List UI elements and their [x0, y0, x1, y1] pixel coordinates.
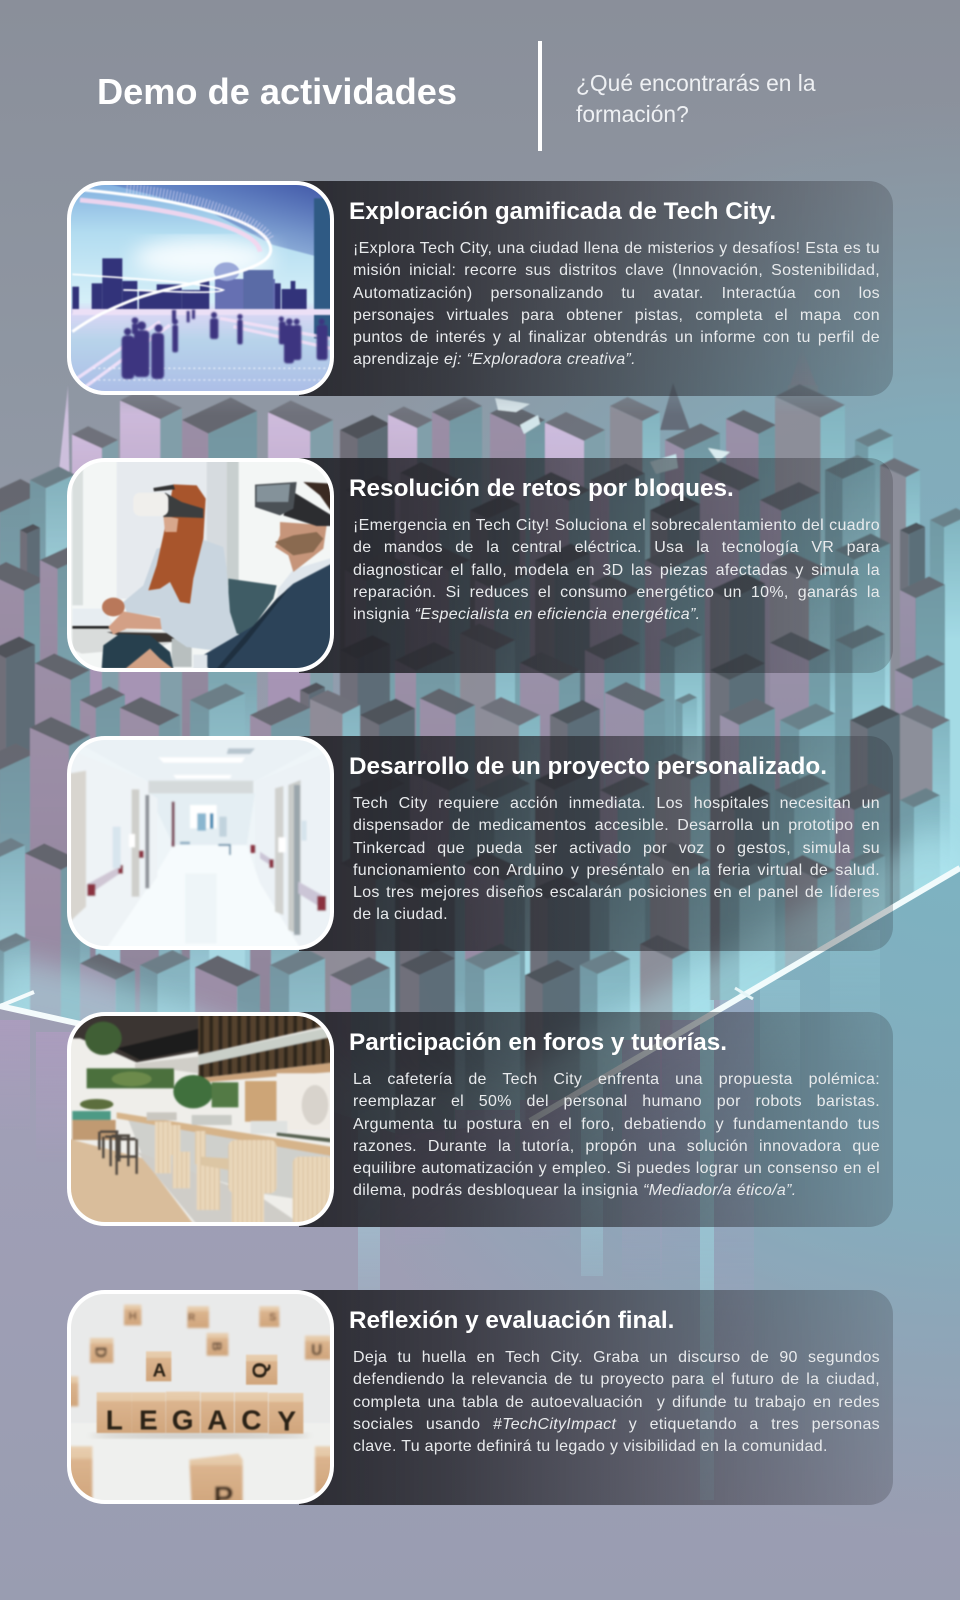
- panel background: [299, 1290, 893, 1505]
- body text: funcionamiento con Arduino y preséntalo en la feria virtual de salud.: [353, 862, 880, 879]
- subtitle: formación?: [576, 101, 689, 127]
- panel: exploración gamificada: [67, 181, 893, 396]
- heading: Reflexión y evaluación final.: [349, 1307, 674, 1334]
- body text: insignia “Especialista en eficiencia energética”.: [353, 606, 700, 623]
- body text: equilibre automatización y empleo. Si puedes lograr un consenso en el: [353, 1160, 880, 1177]
- photo: wooden LEGACY blocks: [67, 1290, 334, 1504]
- body text: razones. Durante la tutoría, propón una solución innovadora que: [353, 1138, 880, 1155]
- panel background: [299, 458, 893, 673]
- photo: futuristic city with people: [67, 181, 334, 395]
- body text: defendiendo la relevancia de tu proyecto para el futuro de la ciudad,: [353, 1371, 880, 1388]
- title: Demo de actividades: [97, 71, 457, 112]
- body text: [353, 1349, 880, 1455]
- panel: participación en foros: [67, 1012, 893, 1227]
- photo: wooden LEGACY blocks: Y: [277, 1405, 296, 1436]
- panel: reflexión y evaluación: [67, 1290, 893, 1505]
- photo: wooden LEGACY blocks: Q: [248, 1362, 271, 1378]
- heading: Desarrollo de un proyecto personalizado.: [349, 753, 827, 780]
- body text: ¡Explora Tech City, una ciudad llena de misterios y desafíos! Esta es tu: [353, 240, 880, 257]
- panel background: [299, 736, 893, 951]
- body text: reemplazar el 50% del personal humano por robots baristas.: [353, 1093, 880, 1110]
- body text: La cafetería de Tech City enfrenta una propuesta polémica:: [353, 1071, 880, 1088]
- header divider: [538, 41, 542, 151]
- subtitle: [576, 70, 816, 127]
- heading: Exploración gamificada de Tech City.: [349, 198, 776, 225]
- body text: [353, 1071, 880, 1199]
- photo: wooden LEGACY blocks: B: [209, 1341, 223, 1350]
- body text: [353, 795, 880, 923]
- body text: de mandos de la central eléctrica. Usa la tecnología VR para: [353, 539, 880, 556]
- panel background: [299, 1012, 893, 1227]
- photo: wooden LEGACY blocks: A: [207, 1404, 227, 1435]
- body text: Deja tu huella en Tech City. Graba un discurso de 90 segundos: [353, 1349, 880, 1366]
- body text: personajes virtuales para obtener pistas, completa el mapa con: [353, 307, 880, 324]
- photo: wooden LEGACY blocks: U: [311, 1342, 322, 1358]
- body text: clave. Tu aporte definirá tu legado y visibilidad en la comunidad.: [353, 1438, 828, 1455]
- body text: ¡Emergencia en Tech City! Soluciona el sobrecalentamiento del cuadro: [353, 517, 880, 534]
- heading: Resolución de retos por bloques.: [349, 475, 734, 502]
- body text: [353, 517, 880, 623]
- body text: sociales usando #TechCityImpact y etiquetando a tres personas: [353, 1416, 880, 1433]
- photo: wooden LEGACY blocks: D: [91, 1346, 108, 1357]
- photo: wooden LEGACY blocks: E: [138, 1404, 157, 1435]
- panel: resolución de retos: [67, 458, 893, 673]
- body text: dilema, podrás desbloquear la insignia “Mediador/a ético/a”.: [353, 1182, 796, 1199]
- panel: desarrollo de proyecto: [67, 736, 893, 951]
- subtitle: ¿Qué encontrarás en la: [576, 70, 816, 96]
- photo: wooden LEGACY blocks: L: [105, 1404, 122, 1435]
- photo: wooden LEGACY blocks: R: [188, 1312, 196, 1323]
- body text: dispensador de medicamentos accesible. Desarrolla un prototipo en: [353, 817, 880, 834]
- body text: Tinkercad que pueda ser activado por voz o gestos, simula su: [353, 840, 880, 857]
- photo: wooden LEGACY blocks: G: [171, 1404, 193, 1435]
- body text: [353, 240, 880, 368]
- body text: diagnosticar el fallo, modela en 3D las piezas afectadas y simula la: [353, 562, 880, 579]
- body text: misión inicial: recorre sus distritos clave (Innovación, Sostenibilidad,: [353, 262, 880, 279]
- body text: Automatización) personalizando tu avatar. Interactúa con los: [353, 285, 880, 302]
- photo: wooden LEGACY blocks: S: [269, 1311, 276, 1323]
- photo: cafeteria interior: [67, 1012, 334, 1226]
- heading: Participación en foros y tutorías.: [349, 1029, 727, 1056]
- body text: reparación. Si reduces el consumo energético un 10%, ganarás la: [353, 584, 880, 601]
- photo: hospital corridor: [67, 736, 334, 950]
- body text: aprendizaje ej: “Exploradora creativa”.: [353, 351, 636, 368]
- photo: wooden LEGACY blocks: H: [128, 1310, 136, 1322]
- body text: Argumenta tu postura en el foro, debatiendo y fundamentando tus: [353, 1116, 880, 1133]
- body text: Tech City requiere acción inmediata. Los hospitales necesitan un: [353, 795, 880, 812]
- photo: wooden LEGACY blocks: A: [152, 1359, 166, 1380]
- body text: de la ciudad.: [353, 906, 448, 923]
- panel background: [299, 181, 893, 396]
- photo: wooden LEGACY blocks: C: [241, 1404, 261, 1435]
- body text: Los tres mejores diseños escalarán posiciones en el panel de líderes: [353, 884, 880, 901]
- body text: completa una tabla de autoevaluación y difunde tu trabajo en redes: [353, 1394, 880, 1411]
- photo: people with VR headsets: [67, 458, 334, 672]
- body text: puntos de interés y al finalizar obtendrás un informe con tu perfil de: [353, 329, 880, 346]
